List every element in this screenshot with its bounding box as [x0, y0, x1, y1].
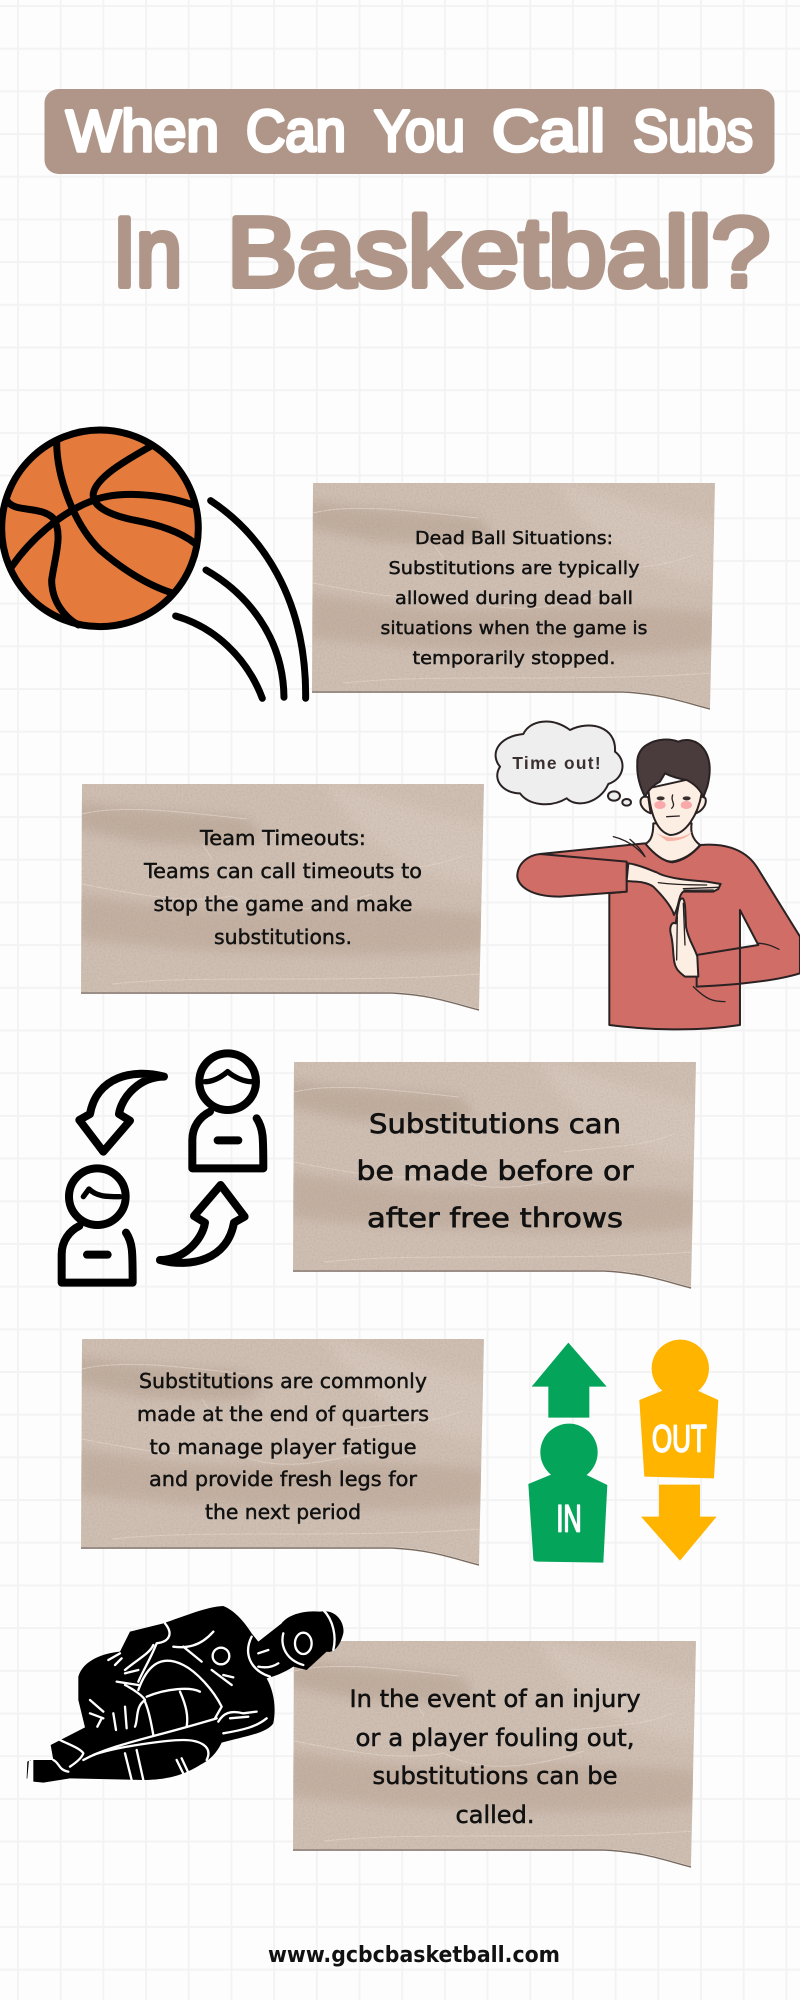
player bottom left — [62, 1168, 133, 1283]
thought bubble: Time out! — [512, 753, 601, 773]
title banner: Can — [246, 99, 346, 164]
title banner — [44, 89, 774, 174]
orange out player: OUT — [652, 1418, 707, 1460]
panel: injury or fouling out — [289, 1636, 699, 1869]
panel: team timeouts: Team Timeouts: — [199, 826, 366, 850]
vertical hand — [670, 898, 698, 977]
icon: swapping players — [62, 1053, 263, 1283]
footer url: www.gcbcbasketball.com — [268, 1943, 560, 1968]
panel: team timeouts — [77, 779, 487, 1012]
ears — [640, 797, 706, 813]
icon: injured player lying down — [27, 1606, 344, 1783]
panel: dead ball situations: Dead Ball Situations: — [415, 528, 613, 549]
panel: end of quarters: and provide fresh legs for — [149, 1467, 418, 1491]
arrow up — [160, 1185, 245, 1263]
panel: dead ball situations — [308, 478, 718, 711]
sweater creases — [613, 837, 779, 1002]
panel: team timeouts: substitutions. — [214, 925, 352, 949]
player top right — [192, 1053, 263, 1168]
horizontal hand — [627, 863, 721, 915]
title banner: Subs — [633, 99, 753, 164]
heading: In Basketball?: Basketball? — [227, 197, 770, 307]
horizontal arm — [517, 854, 627, 897]
boot toe — [27, 1760, 31, 1780]
panel: dead ball situations: Substitutions are typically — [388, 558, 640, 579]
title banner: Call — [492, 99, 605, 164]
cheeks and facial features — [654, 795, 692, 817]
hand finger lines — [658, 883, 718, 890]
face — [648, 778, 702, 835]
uniform line details — [28, 1610, 335, 1780]
panel: end of quarters: the next period — [205, 1500, 361, 1524]
green in player — [528, 1343, 607, 1563]
orange out player — [639, 1340, 718, 1561]
sweater — [540, 843, 800, 1029]
hair — [637, 739, 710, 797]
panel: injury or fouling out: or a player fouling out, — [356, 1724, 634, 1752]
title banner: When — [66, 99, 219, 164]
green in player: IN — [556, 1499, 582, 1541]
illustration: man signalling time out with speech bubble — [496, 722, 800, 1029]
heading: In Basketball?: In — [113, 197, 182, 307]
panel: injury or fouling out: In the event of an injury — [350, 1685, 640, 1713]
panel: free throws: after free throws — [367, 1203, 623, 1234]
panel: free throws: be made before or — [356, 1156, 634, 1187]
arrow down — [79, 1074, 164, 1152]
panel: dead ball situations: situations when the game is — [380, 618, 648, 639]
neck — [645, 823, 700, 862]
thought bubble — [496, 722, 631, 806]
panel: dead ball situations: temporarily stopped. — [412, 648, 616, 669]
icon: in and out players — [528, 1340, 718, 1563]
icon: basketball with motion lines — [2, 430, 306, 698]
vertical hand finger lines — [677, 903, 685, 960]
panel: end of quarters: Substitutions are commonly — [139, 1369, 427, 1393]
panel: free throws — [289, 1057, 699, 1290]
panel: dead ball situations: allowed during dead ball — [395, 588, 633, 609]
panel: injury or fouling out: substitutions can be — [372, 1762, 618, 1790]
panel: end of quarters: made at the end of quarters — [137, 1402, 429, 1426]
title banner: You — [374, 99, 465, 164]
panel: free throws: Substitutions can — [369, 1109, 621, 1140]
panel: end of quarters: to manage player fatigue — [150, 1435, 416, 1459]
panel: team timeouts: stop the game and make — [154, 892, 412, 916]
panel: team timeouts: Teams can call timeouts to — [143, 859, 422, 883]
panel: injury or fouling out: called. — [456, 1801, 534, 1829]
panel: end of quarters — [77, 1334, 487, 1567]
neck shadow — [656, 832, 692, 841]
